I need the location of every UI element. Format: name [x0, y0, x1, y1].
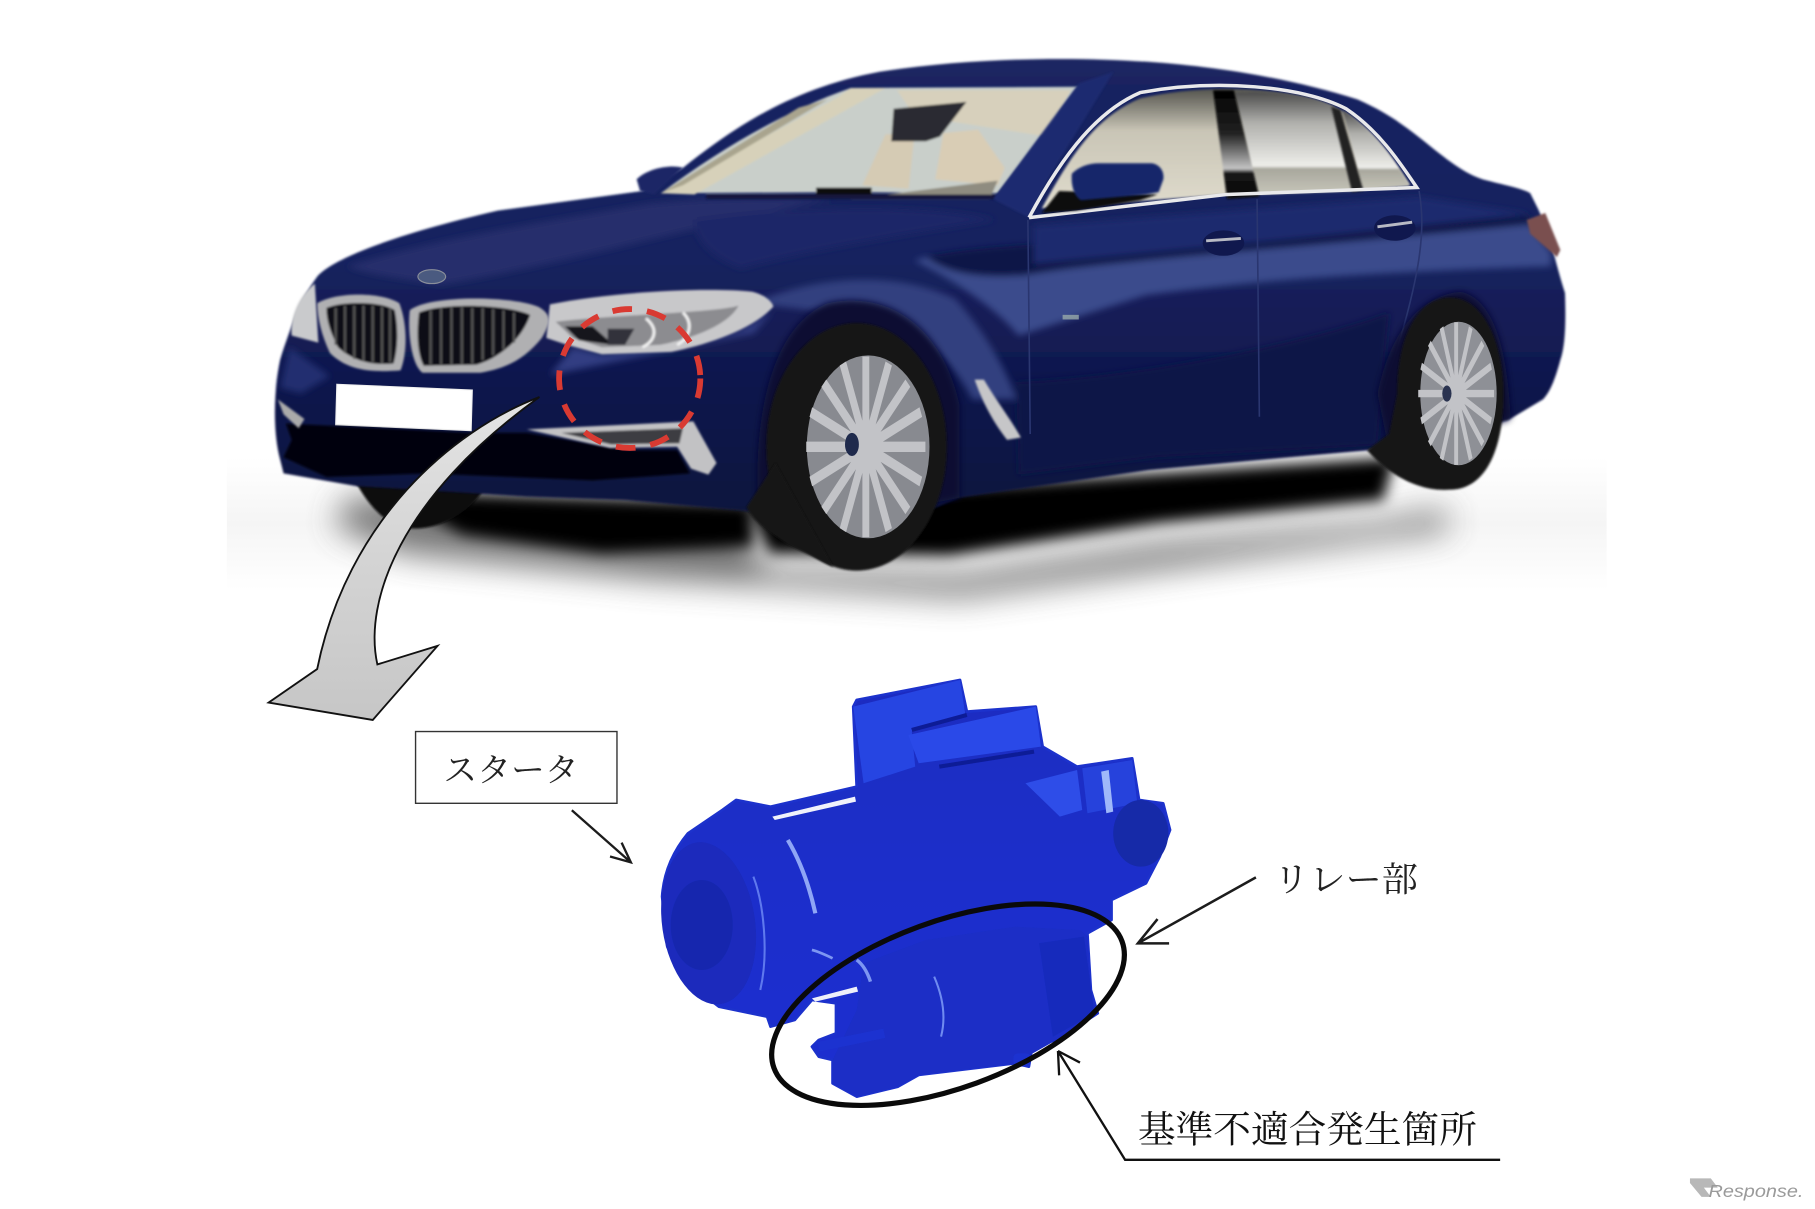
A pillar: [993, 72, 1114, 218]
rear tail light: [1527, 213, 1560, 257]
license plate mask: [336, 384, 472, 431]
kidney grille left: [317, 295, 406, 371]
side windows: [1029, 85, 1417, 218]
arrow: label to starter: [572, 810, 631, 862]
interior centre: [862, 134, 914, 189]
front handle: [1203, 230, 1244, 256]
left fog trim: [278, 399, 304, 428]
label box: スタータ: [416, 732, 617, 803]
door lines and handles: [1028, 191, 1422, 434]
badge: [1063, 315, 1079, 319]
rear-view mirror: [891, 102, 967, 141]
ground shadow: [227, 457, 1607, 597]
relay part: [812, 927, 1098, 1097]
rear wheel: [1367, 297, 1504, 490]
label box: スタータ: スタータ: [443, 752, 579, 789]
rear handle: [1374, 215, 1416, 241]
rear arch: [1377, 292, 1511, 451]
C pillar: [1331, 106, 1364, 192]
chrome window trim: [1029, 85, 1417, 218]
interior seat: [935, 130, 1005, 185]
watermark: Response: [1690, 1178, 1803, 1201]
leader arrow: non-conformity label: [1058, 1051, 1500, 1160]
left headlight sliver: [291, 284, 318, 343]
dashed red circle: [559, 309, 700, 448]
door vent chrome: [975, 380, 1021, 440]
upper terminal blocks: [853, 680, 1168, 867]
lower air intake: [284, 424, 690, 480]
windshield: [661, 87, 1079, 199]
car photo: blue BMW sedan: [227, 59, 1607, 597]
headlight: [546, 290, 773, 354]
label: 基準不適合発生箇所: 基準不適合発生箇所: [1138, 1109, 1477, 1151]
BMW roundel: [418, 270, 446, 284]
black ellipse: non-conformity location: [745, 863, 1151, 1146]
curved grey arrow: [269, 397, 539, 720]
car body: [275, 59, 1565, 512]
arrow: relay label to relay part: [1138, 877, 1256, 943]
starter silhouette: [662, 680, 1170, 1097]
far front wheel: [353, 477, 486, 529]
interior ceiling: [897, 90, 1071, 137]
far mirror: [637, 167, 683, 194]
kidney grille right: [409, 298, 549, 373]
front wheel: [747, 323, 947, 571]
fog lamp surround: [527, 421, 717, 475]
left A-pillar strip: [661, 100, 828, 193]
white slot highlights: [772, 797, 856, 820]
beige dash reflection band: [661, 88, 886, 194]
mirror shadow: [1042, 191, 1158, 213]
body highlights: [280, 197, 1551, 475]
watermark: Response: Response.: [1708, 1181, 1803, 1201]
label: リレー部: リレー部: [1273, 860, 1418, 899]
starter motor illustration: [651, 680, 1170, 1097]
side mirror: [1072, 163, 1163, 200]
B pillar: [1213, 90, 1259, 199]
front arch: [757, 301, 960, 509]
end cap: [651, 836, 815, 1010]
dash: [851, 181, 998, 199]
